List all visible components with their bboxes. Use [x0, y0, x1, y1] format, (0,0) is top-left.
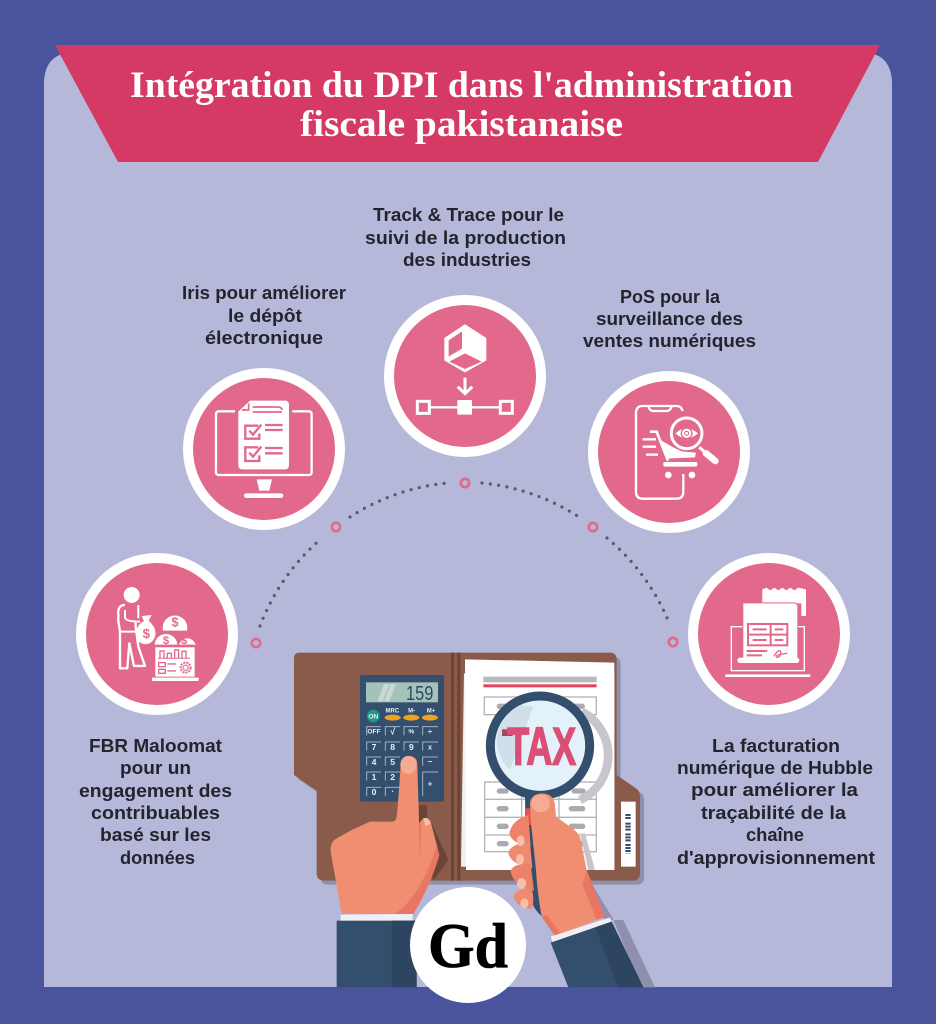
title banner: [55, 45, 880, 162]
label: FBR Maloomat: basé sur les: [100, 825, 211, 845]
calculator: ·: [391, 787, 394, 796]
icon circle: Iris: [183, 368, 345, 530]
calculator: ON: [368, 714, 379, 721]
icon circle: Track & Trace: [384, 295, 546, 457]
illustration: folder, calculator, magnifier and hands: [294, 653, 655, 987]
label: FBR Maloomat: pour un: [120, 758, 191, 778]
magnifying glass: [490, 696, 608, 917]
label: FBR Maloomat: données: [120, 848, 195, 868]
calculator: %: [408, 729, 414, 736]
label: Hubble: [677, 736, 875, 868]
icon circle: Hubble invoice: [688, 553, 850, 715]
logo: Gd: [410, 887, 526, 1003]
magnifying glass: TAX: [507, 717, 576, 776]
calculator: 7: [372, 742, 377, 752]
label: FBR Maloomat: [79, 736, 232, 868]
calculator: –: [428, 757, 433, 766]
label: FBR Maloomat: FBR Maloomat: [89, 736, 222, 756]
left hand: [331, 756, 448, 987]
calculator: 5: [390, 757, 395, 767]
calculator: 2: [390, 772, 395, 782]
label: PoS: surveillance des: [596, 309, 743, 329]
calculator: x: [428, 742, 433, 751]
label: Hubble: chaîne: [746, 825, 804, 845]
calculator: 159: [406, 682, 433, 705]
dotted arc with ring markers: [252, 479, 677, 647]
label: Track & Trace: [365, 205, 566, 270]
label: Hubble: d'approvisionnement: [677, 848, 875, 868]
icon circle: FBR Maloomat: $: [163, 635, 170, 647]
calculator: 9: [409, 742, 414, 752]
folder: [294, 653, 644, 885]
calculator: √: [390, 727, 396, 737]
label: Hubble: numérique de Hubble: [677, 758, 873, 778]
title banner: Intégration du DPI dans l'administration: [130, 65, 793, 106]
right hand: [508, 793, 655, 987]
label: Track & Trace: Track & Trace pour le: [373, 205, 564, 225]
label: Iris: le dépôt: [228, 306, 302, 326]
label: FBR Maloomat: engagement des: [79, 781, 232, 801]
calculator: +: [428, 780, 433, 789]
label: PoS: [583, 287, 756, 351]
calculator: M+: [427, 709, 436, 715]
icon circle: PoS: [588, 371, 750, 533]
calculator: M-: [408, 709, 415, 715]
calculator: MRC: [386, 709, 400, 715]
label: Track & Trace: suivi de la production: [365, 228, 566, 248]
label: Track & Trace: des industries: [403, 250, 531, 270]
label: Hubble: La facturation: [712, 736, 840, 756]
calculator: 1: [372, 772, 377, 782]
tax form papers: [461, 659, 636, 870]
calculator: OFF: [367, 729, 381, 736]
label: Iris: électronique: [205, 328, 323, 348]
label: PoS: PoS pour la: [620, 287, 721, 307]
calculator: ÷: [428, 727, 433, 736]
icon circle: FBR Maloomat: $: [181, 635, 188, 647]
icon circle: FBR Maloomat: $: [143, 626, 151, 641]
label: FBR Maloomat: contribuables: [91, 803, 220, 823]
calculator: 8: [390, 742, 395, 752]
label: Iris: Iris pour améliorer: [182, 283, 346, 303]
icon circle: FBR Maloomat: $: [171, 616, 179, 630]
calculator: 0: [372, 787, 377, 797]
label: Iris: [182, 283, 346, 348]
label: Hubble: pour améliorer la: [691, 780, 859, 800]
label: PoS: ventes numériques: [583, 331, 756, 351]
logo: Gd: Gd: [428, 910, 508, 981]
calculator: [360, 675, 444, 802]
icon circle: FBR Maloomat: [76, 553, 238, 715]
title banner: fiscale pakistanaise: [300, 104, 623, 145]
calculator: 4: [372, 757, 377, 767]
label: Hubble: traçabilité de la: [701, 803, 847, 823]
